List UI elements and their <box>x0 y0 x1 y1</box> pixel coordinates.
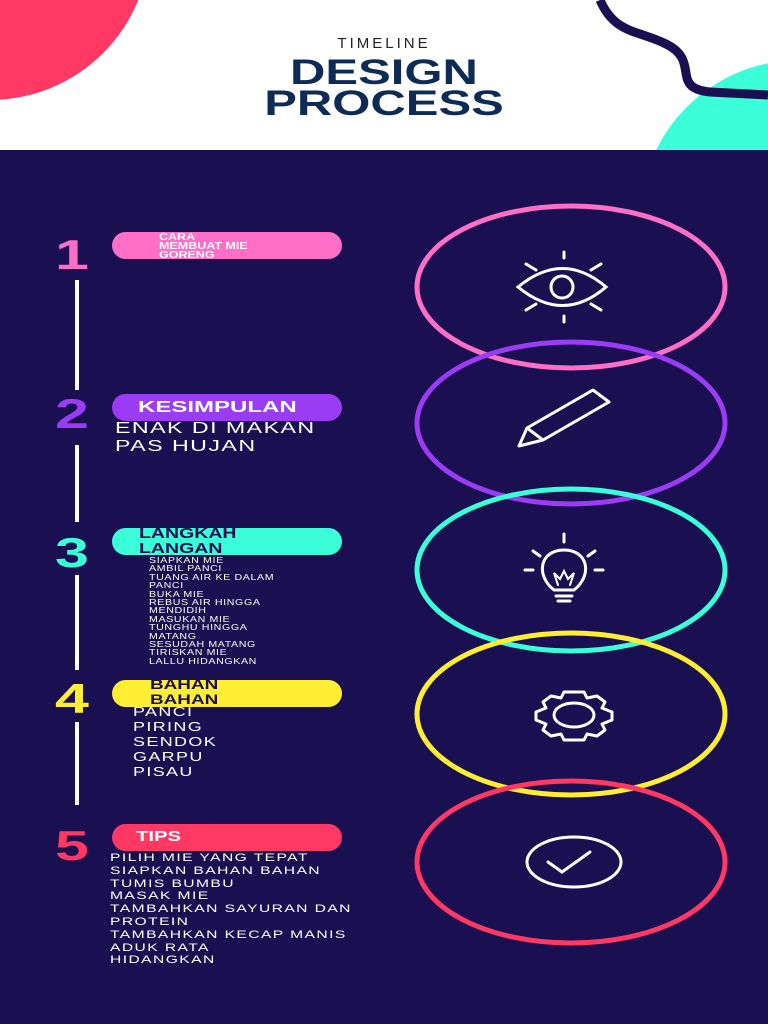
ring 5 check <box>417 781 725 943</box>
step 3 list: MATANG <box>149 631 197 641</box>
step 5 list: MASAK MIE <box>110 890 210 902</box>
step 5 list: PILIH MIE YANG TEPAT <box>110 852 309 864</box>
step numbers: 3 <box>55 529 89 576</box>
step 5 list <box>110 852 352 966</box>
step 3 list: REBUS AIR HINGGA <box>149 597 261 607</box>
ring 1 eye <box>417 206 725 368</box>
step 4 list: PIRING <box>133 719 203 734</box>
step 5 list: ADUK RATA <box>110 942 210 954</box>
step 5 list: SIAPKAN BAHAN BAHAN <box>110 865 321 877</box>
step 1 pill: MEMBUAT MIE <box>159 241 248 252</box>
ring 4 gear <box>417 633 725 795</box>
title: DESIGN <box>290 53 478 92</box>
step 1 pill <box>112 232 342 259</box>
step 3 list: LALLU HIDANGKAN <box>149 656 257 666</box>
ring 3 bulb <box>417 489 725 651</box>
subtitle: timeline: TIMELINE <box>337 35 431 52</box>
step 3 list: PANCI <box>149 580 184 590</box>
step 3 list: SESUDAH MATANG <box>149 639 256 649</box>
step 5 pill: TIPS <box>136 828 181 845</box>
step 2 pill <box>112 394 342 421</box>
step numbers: 2 <box>55 390 89 437</box>
step 3 list: BUKA MIE <box>149 589 204 599</box>
step 2 text: PAS HUJAN <box>115 438 257 455</box>
step 3 list: TIRISKAN MIE <box>149 647 227 657</box>
icon rings <box>414 204 728 946</box>
step 5 list: PROTEIN <box>110 916 189 928</box>
step numbers: 1 <box>55 231 89 278</box>
step 2 pill: KESIMPULAN <box>138 399 297 416</box>
ring 2 pencil <box>417 342 725 504</box>
step 3 pill <box>112 528 342 555</box>
step 2 text: ENAK DI MAKAN <box>115 420 316 437</box>
step 5 pill <box>112 824 342 851</box>
step 5 list: TAMBAHKAN KECAP MANIS <box>110 929 347 941</box>
step 3 list <box>149 555 274 666</box>
step 1 pill: CARA <box>159 232 195 243</box>
step numbers: 4 <box>55 675 89 722</box>
step 3 list: TUNGHU HINGGA <box>149 622 247 632</box>
step 3 list: SIAPKAN MIE <box>149 555 224 565</box>
step 5 list: TUMIS BUMBU <box>110 878 235 890</box>
step 5 list: TAMBAHKAN SAYURAN DAN <box>110 903 352 915</box>
step 1 pill: GORENG <box>159 250 215 261</box>
step numbers <box>55 231 89 869</box>
step numbers: 5 <box>55 822 89 869</box>
timeline line <box>75 280 79 805</box>
step 4 list: PISAU <box>133 764 194 779</box>
title <box>264 53 504 123</box>
step 3 pill: LANGAN <box>139 540 222 557</box>
title: PROCESS <box>264 84 504 123</box>
step 2 text <box>115 420 316 455</box>
step 3 pill: LANGKAH <box>139 525 236 542</box>
step 4 list <box>133 704 217 779</box>
step 5 list: HIDANGKAN <box>110 954 216 966</box>
step 3 list: MENDIDIH <box>149 605 207 615</box>
step 4 list: SENDOK <box>133 734 217 749</box>
step 4 pill <box>112 680 342 707</box>
step 4 list: PANCI <box>133 704 193 719</box>
step 3 list: TUANG AIR KE DALAM <box>149 572 274 582</box>
header decorative shapes <box>0 0 768 150</box>
step 3 list: MASUKAN MIE <box>149 614 230 624</box>
step 3 list: AMBIL PANCI <box>149 563 222 573</box>
step 4 list: GARPU <box>133 749 204 764</box>
step 4 pill: BAHAN <box>150 676 218 692</box>
step 4 pill: BAHAN <box>150 691 218 707</box>
